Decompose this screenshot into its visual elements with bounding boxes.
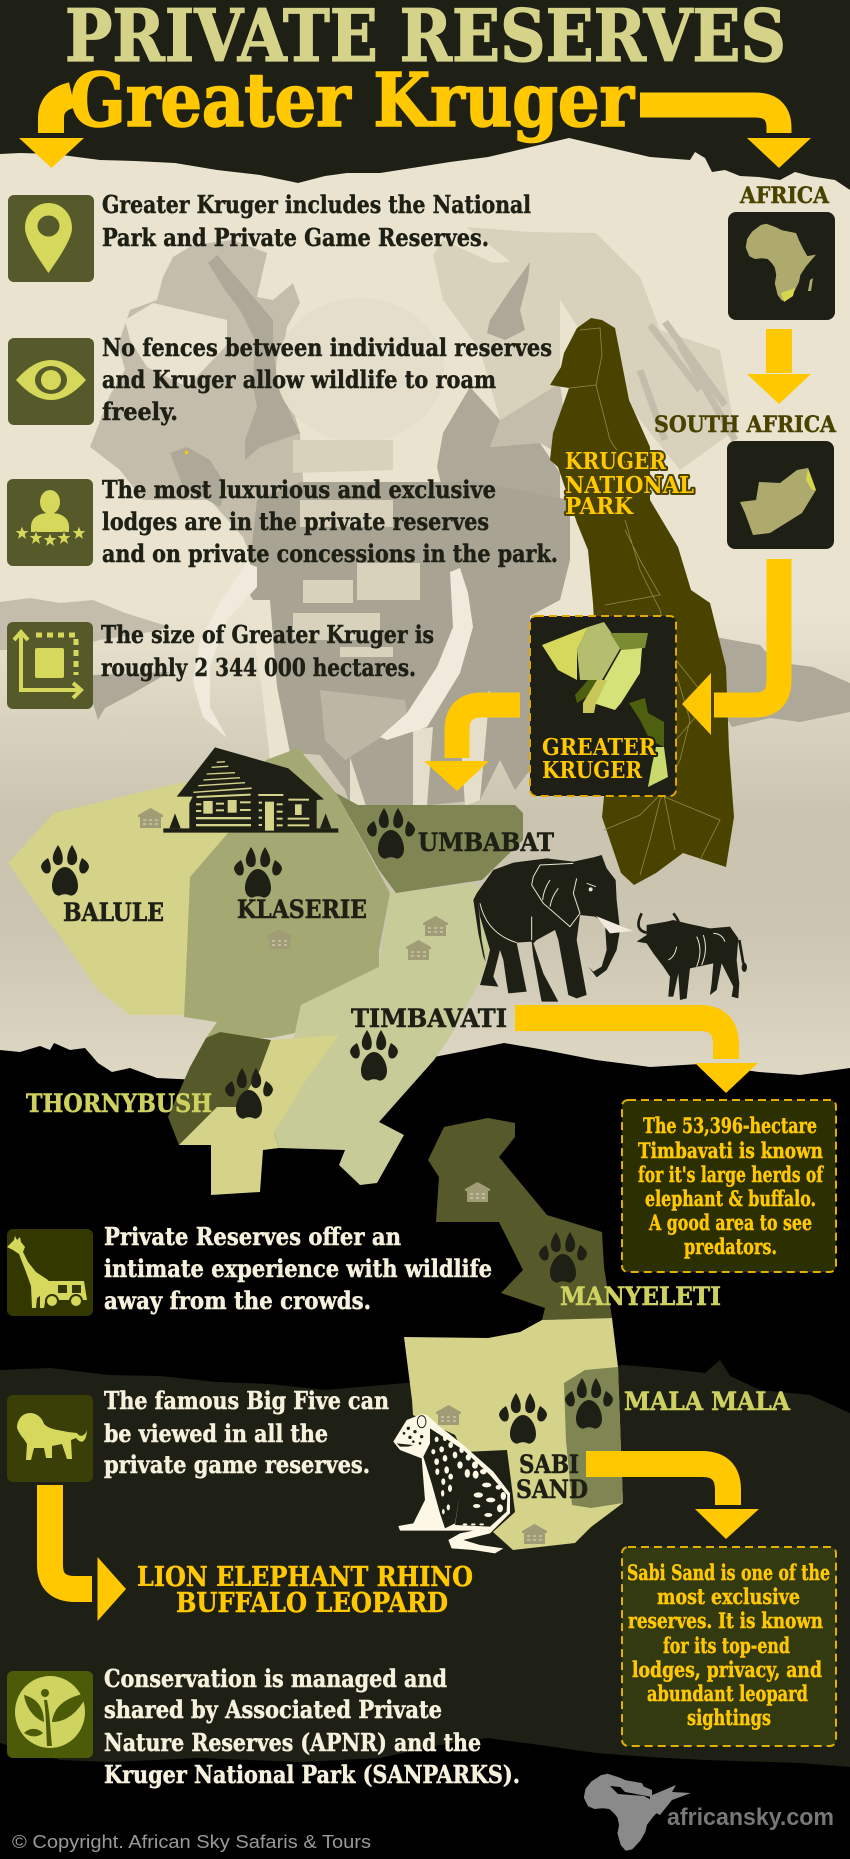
map region: Balule [8, 780, 240, 1015]
callout: Timbavati: predators. [684, 1234, 777, 1259]
text: intimate experience [104, 1222, 492, 1315]
item 4: size [7, 620, 434, 709]
text: Big Five list: BUFFALO LEOPARD [176, 1588, 448, 1619]
dark lower band [0, 1360, 850, 1767]
text: big five [104, 1386, 389, 1479]
icon: map pin [8, 195, 94, 282]
text: luxury lodges: The most luxurious and exclusive [102, 475, 496, 504]
map labels: THORNYBUSH [26, 1089, 212, 1118]
icon: lodge markers [138, 808, 547, 1544]
item 1: location [8, 190, 531, 282]
text: intimate experience: intimate experience with wildlife [104, 1254, 492, 1283]
callout: Timbavati: A good area to see [648, 1210, 812, 1235]
icon: lion [7, 1395, 93, 1482]
callout: Sabi Sand: sightings [687, 1705, 771, 1730]
arrow: Africa to South Africa [747, 329, 811, 404]
map labels: UMBABAT [418, 828, 554, 857]
title: Greater Kruger: Greater Kruger [70, 58, 635, 144]
text: location: Greater Kruger includes the National [102, 190, 531, 219]
text: conservation: Nature Reserves (APNR) and the [104, 1728, 481, 1757]
panel: Africa map [728, 212, 835, 320]
text: conservation: Kruger National Park (SANPARKS). [104, 1760, 520, 1789]
callout: Timbavati: The 53,396-hectare [643, 1113, 817, 1138]
map region: Thornybush south block [179, 1035, 339, 1195]
text: big five: The famous Big Five can [104, 1386, 389, 1415]
right ear [466, 227, 735, 470]
icon: plant [7, 1671, 93, 1758]
map labels: SABI [519, 1450, 579, 1479]
arrow: title right down [640, 105, 811, 168]
text: conservation [104, 1664, 520, 1789]
callout: Timbavati [622, 1100, 836, 1272]
left tusk [193, 563, 257, 738]
copyright: © Copyright. African Sky Safaris & Tours [12, 1832, 371, 1852]
icon: elephant silhouette [473, 855, 633, 1002]
label: Greater Kruger: KRUGER [542, 757, 643, 784]
text: luxury lodges [102, 475, 558, 568]
trunk mass [247, 482, 570, 806]
text: no fences: freely. [102, 397, 178, 426]
map labels: SAND [516, 1475, 588, 1504]
map labels: MALA MALA [624, 1387, 791, 1416]
text: size: roughly 2 344 000 hectares. [101, 653, 416, 682]
text: conservation: shared by Associated Private [104, 1695, 442, 1724]
callout: Sabi Sand: abundant leopard [647, 1681, 808, 1706]
heading: Africa: AFRICA [739, 183, 830, 209]
forehead dome [276, 298, 444, 442]
top dark torn header band [0, 0, 850, 190]
icon: buffalo silhouette [637, 913, 747, 1000]
arrow: title left down [19, 95, 84, 168]
text: size [101, 620, 434, 682]
callout: Sabi Sand: most exclusive [657, 1584, 800, 1609]
icon: paw prints [41, 808, 613, 1444]
map region: Sabi Sand [404, 1318, 623, 1550]
map region: Klaserie [184, 748, 390, 1038]
text: size: The size of Greater Kruger is [101, 620, 434, 649]
panel: South Africa map [727, 441, 834, 549]
icon: giraffe and jeep [7, 1229, 93, 1316]
label: Kruger National Park: PARK [565, 493, 634, 520]
icon: eye [8, 338, 94, 425]
text: conservation: Conservation is managed and [104, 1664, 447, 1693]
callout: Sabi Sand: lodges, privacy, and [632, 1657, 822, 1682]
text: big five: private game reserves. [104, 1450, 370, 1479]
arrow: South Africa to Greater Kruger [682, 559, 779, 735]
callout: Sabi Sand [622, 1547, 836, 1746]
map region: Thornybush [168, 1032, 271, 1145]
icon: area square [7, 622, 93, 709]
right cheek [433, 240, 560, 420]
text: luxury lodges: lodges are in the private reserves [102, 507, 489, 536]
logo: africansky.com [584, 1774, 834, 1851]
label: Kruger National Park: NATIONAL [565, 472, 694, 499]
item 7: conservation [7, 1664, 520, 1789]
label: Kruger National Park: KRUGER [565, 448, 667, 475]
text: luxury lodges: and on private concessions in the park. [102, 539, 558, 568]
background: faded elephant and acacia trees [0, 227, 850, 806]
text: no fences: and Kruger allow wildlife to roam [102, 365, 496, 394]
item 5: intimate experience [7, 1222, 492, 1316]
map labels: KLASERIE [237, 895, 367, 924]
map labels: BALULE [63, 898, 164, 927]
label: Kruger National Park [565, 448, 694, 520]
face highlights [293, 440, 420, 657]
panel: Greater Kruger inset map [530, 616, 676, 796]
acacia tree right [715, 637, 850, 727]
icon: log cabin [163, 747, 338, 833]
callout: Sabi Sand: for its top-end [663, 1633, 790, 1658]
text: intimate experience: Private Reserves offer an [104, 1222, 401, 1251]
logo: africansky.com: africansky.com [667, 1804, 834, 1831]
text: Big Five list: LION ELEPHANT RHINO [137, 1562, 473, 1593]
text: intimate experience: away from the crowds. [104, 1286, 371, 1315]
map region: Mala Mala [564, 1367, 623, 1508]
arrow: Timbavati to callout [515, 1018, 758, 1093]
right tusk [380, 568, 473, 740]
arrow: Greater Kruger to reserves map [424, 705, 520, 791]
arrow: Big Five to list [50, 1485, 126, 1621]
text: no fences: No fences between individual reserves [102, 333, 552, 362]
panel: Kruger National Park map [550, 318, 734, 885]
map labels [26, 828, 791, 1504]
heading: South Africa: SOUTH AFRICA [654, 412, 837, 438]
item 3: luxury lodges [7, 475, 558, 568]
label: Greater Kruger: GREATER [542, 734, 657, 761]
item 6: big five [7, 1386, 389, 1482]
arrow: Sabi Sand to callout [586, 1464, 759, 1539]
small yellow mark [185, 451, 188, 454]
callout: Timbavati: Timbavati is known [638, 1138, 823, 1163]
icon: five star guest [7, 479, 93, 566]
acacia tree left [0, 598, 170, 720]
map labels: TIMBAVATI [351, 1004, 507, 1033]
text: Big Five list [137, 1562, 473, 1619]
icon: leopard [393, 1414, 510, 1553]
head left mass [90, 240, 305, 580]
bottom dark torn band [0, 1043, 850, 1859]
text: location: Park and Private Game Reserves. [102, 223, 489, 252]
callout: Timbavati: elephant & buffalo. [645, 1186, 816, 1211]
text: big five: be viewed in all the [104, 1419, 328, 1448]
map labels: MANYELETI [560, 1282, 721, 1311]
text: location [102, 190, 531, 252]
item 2: no fences [8, 333, 552, 426]
map region: Timbavati [274, 883, 495, 1185]
callout: Sabi Sand: reserves. It is known [628, 1608, 823, 1633]
text: no fences [102, 333, 552, 426]
map region: Umbabat [336, 793, 523, 893]
label: Greater Kruger [542, 734, 657, 784]
map region: Manyeleti [428, 1118, 612, 1320]
